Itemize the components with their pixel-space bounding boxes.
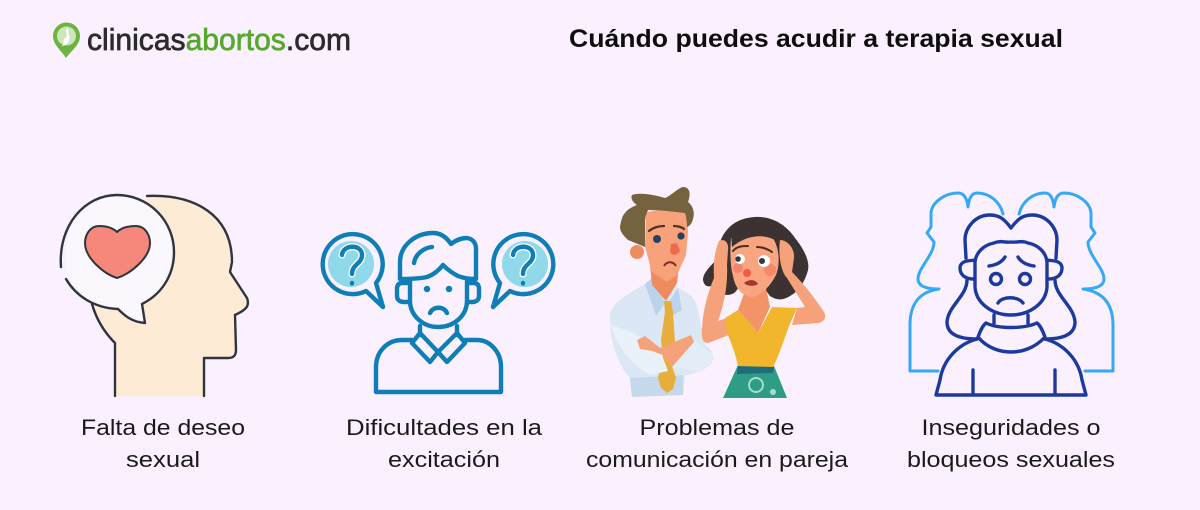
- label: Problemas de: [640, 415, 794, 440]
- woman: [702, 217, 825, 398]
- ear: [630, 245, 644, 259]
- panel: falta de deseo sexual: sexual: [126, 447, 200, 472]
- icon: head with heart speech bubble: [61, 195, 248, 396]
- left arm: [702, 240, 729, 343]
- left silhouette: [910, 193, 1003, 371]
- neck: [650, 265, 679, 301]
- label: Falta de deseo: [81, 415, 245, 440]
- hair: [620, 187, 694, 247]
- right question bubble: [493, 234, 553, 307]
- illustration: worried couple: [610, 187, 825, 398]
- hair: [703, 217, 808, 299]
- sleeves: [611, 325, 668, 375]
- panel: inseguridades o bloqueos sexuales: [907, 193, 1115, 472]
- panel: dificultades en la excitación: [323, 233, 553, 472]
- shirt: [610, 278, 713, 397]
- right arm: [779, 240, 825, 325]
- right silhouette: [1019, 193, 1113, 371]
- eyes, brows, nose, mouth: [735, 254, 745, 264]
- tie: [658, 301, 676, 393]
- neck and chest: [738, 288, 770, 333]
- logo wordmark: clinicasabortos.com: [87, 22, 351, 57]
- label: Dificultades en la: [346, 415, 543, 440]
- icon: confused man with question bubbles: [323, 233, 553, 392]
- panel: dificultades en la excitación: excitación: [388, 447, 500, 472]
- eyes, brows, mouth: [653, 235, 661, 243]
- face: [645, 206, 688, 282]
- title: Cuándo puedes acudir a terapia sexual: [569, 25, 1063, 53]
- left question bubble: [323, 234, 383, 307]
- face and ears: [410, 280, 467, 327]
- front girl: [936, 215, 1086, 395]
- skirt: [723, 365, 787, 398]
- panel: problemas de comunicación en pareja: [586, 187, 849, 472]
- folded arms: [637, 335, 694, 367]
- panel: falta de deseo sexual: [61, 195, 248, 472]
- hair: [400, 233, 476, 279]
- yellow dress: [725, 307, 797, 367]
- panel: inseguridades o bloqueos sexuales: bloqueos sexuales: [907, 447, 1115, 472]
- icon: insecure girl with shadow silhouettes: [910, 193, 1113, 395]
- label: Inseguridades o: [922, 415, 1100, 440]
- icon: location pin: [53, 23, 80, 58]
- icon: heart: [85, 226, 150, 278]
- face: [730, 233, 779, 297]
- panel: problemas de comunicación en pareja: comunicación en pareja: [586, 447, 849, 472]
- neck, collar and body: [420, 326, 457, 335]
- logo: clinicasabortos.com: [53, 22, 351, 58]
- man: [610, 187, 713, 397]
